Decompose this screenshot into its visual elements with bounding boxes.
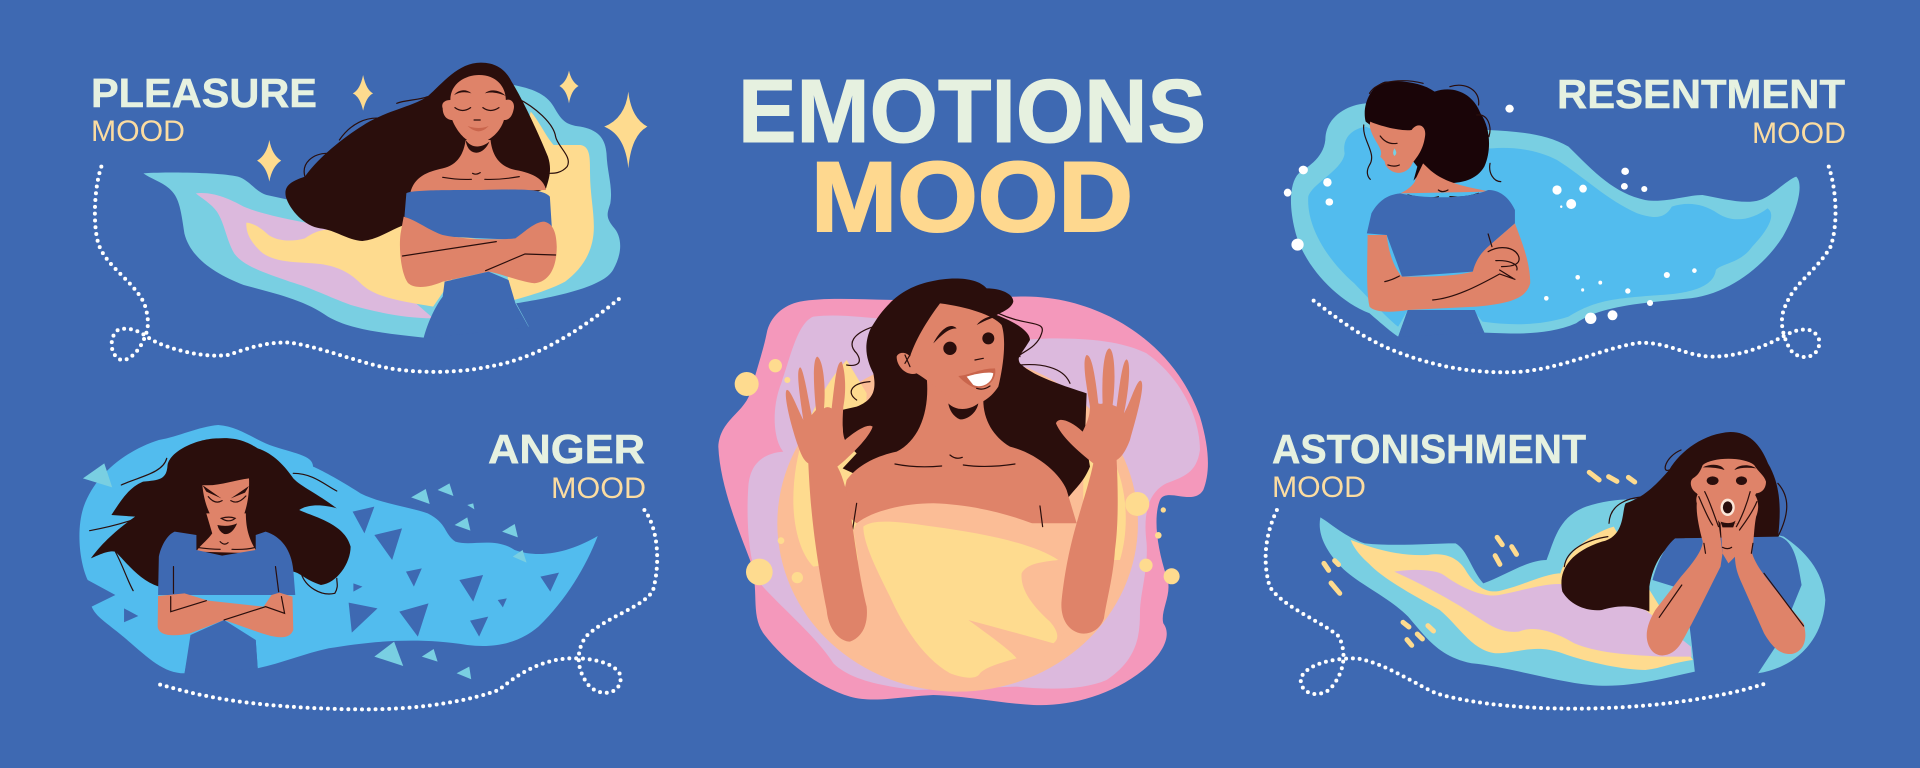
woman: pleasure <box>285 63 568 338</box>
heading: astonishment: MOOD <box>1272 471 1366 504</box>
woman: astonishment <box>1561 432 1805 673</box>
title line: emotions: EMOTIONS <box>738 62 1206 162</box>
heading: resentment <box>1557 71 1846 150</box>
flowing wave: pleasure <box>143 85 620 338</box>
woman: resentment <box>1364 81 1530 337</box>
heading: pleasure: PLEASURE <box>91 70 317 116</box>
heading: anger <box>488 426 646 505</box>
panel: anger illustration <box>79 425 657 709</box>
woman: joy <box>786 278 1142 692</box>
flowing wave: anger <box>79 425 598 673</box>
heading: astonishment: ASTONISHMENT <box>1272 426 1586 472</box>
heading: astonishment <box>1272 426 1586 504</box>
dotted path: resentment <box>1308 167 1836 372</box>
dotted path: astonishment <box>1266 510 1764 709</box>
heading: pleasure: MOOD <box>91 115 185 148</box>
blob background <box>718 296 1208 705</box>
heading: anger: ANGER <box>488 426 645 472</box>
dotted path: anger <box>158 510 657 709</box>
heading: resentment: RESENTMENT <box>1557 71 1845 117</box>
title line: mood: MOOD <box>811 141 1133 252</box>
icon: sparkles <box>257 71 647 182</box>
flowing wave: astonishment <box>1320 499 1825 686</box>
panel: joy illustration (centre) <box>718 278 1208 705</box>
heading: anger: MOOD <box>551 472 646 505</box>
triangle shards: dark <box>124 507 559 637</box>
triangle shards: light <box>83 463 527 679</box>
flowing wave: resentment <box>1291 103 1800 337</box>
panel: pleasure illustration <box>95 63 647 372</box>
woman: anger <box>90 438 351 673</box>
panel: resentment illustration <box>1284 81 1836 372</box>
floating dots <box>735 359 1180 585</box>
heading: resentment: MOOD <box>1752 117 1846 150</box>
floating white bubbles <box>1284 105 1697 324</box>
panel: astonishment illustration <box>1266 432 1825 709</box>
dotted path: pleasure <box>95 167 622 372</box>
heading: pleasure <box>91 70 317 148</box>
title <box>738 62 1206 252</box>
icon: yellow dashes <box>1324 472 1635 645</box>
